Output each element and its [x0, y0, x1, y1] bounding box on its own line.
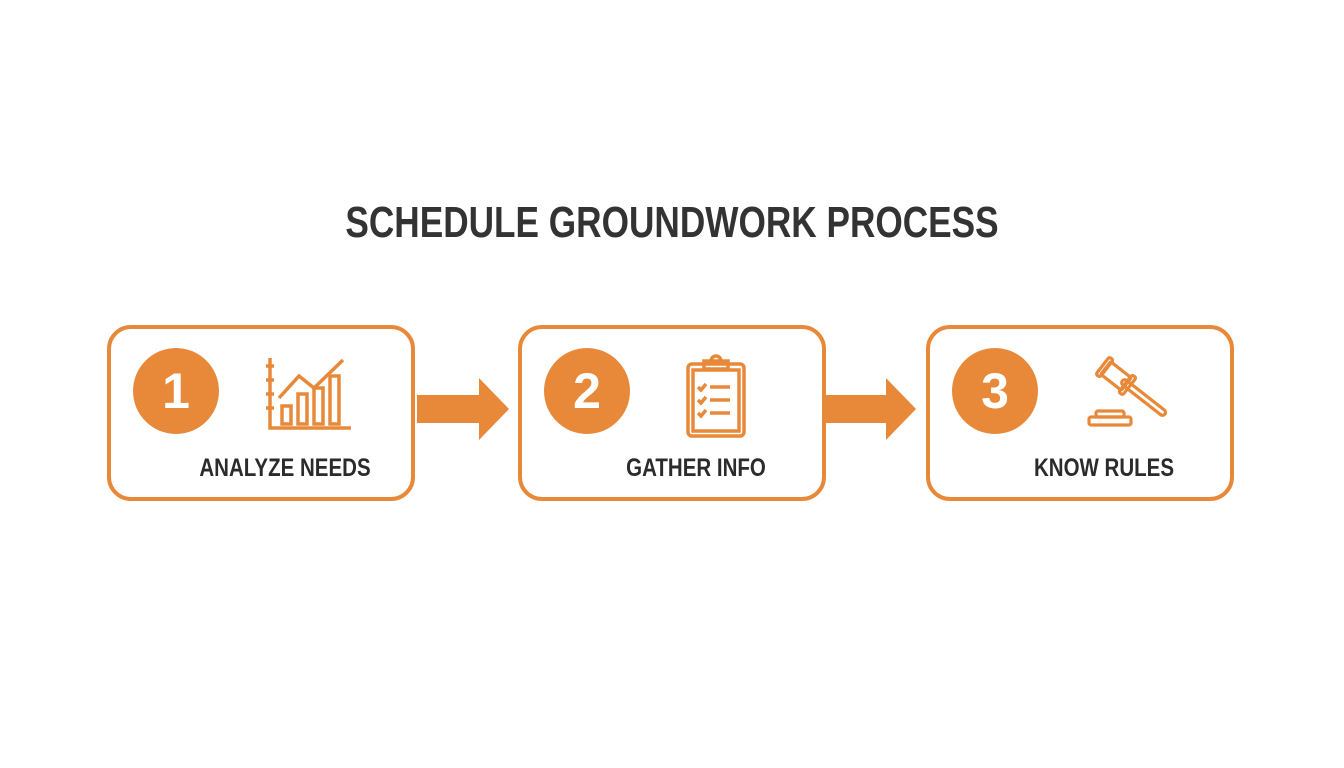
label: KNOW RULES	[1034, 454, 1174, 482]
number badge 3	[952, 348, 1038, 434]
title: SCHEDULE GROUNDWORK PROCESS	[345, 198, 999, 247]
number badge 1	[133, 348, 219, 434]
arrow 2	[826, 378, 916, 440]
panel: step 2	[518, 325, 826, 501]
number badge 2	[544, 348, 630, 434]
number badge 1: 1	[162, 363, 190, 419]
label: GATHER INFO	[626, 454, 766, 482]
panel: step 1	[107, 325, 415, 501]
panel: step 3	[926, 325, 1234, 501]
number badge 3: 3	[981, 363, 1009, 419]
number badge 2: 2	[573, 363, 601, 419]
label: ANALYZE NEEDS	[199, 454, 371, 482]
arrow 1	[417, 378, 509, 440]
icon: gavel	[1087, 356, 1168, 427]
icon: bar chart	[266, 358, 351, 430]
icon: clipboard	[686, 354, 746, 438]
